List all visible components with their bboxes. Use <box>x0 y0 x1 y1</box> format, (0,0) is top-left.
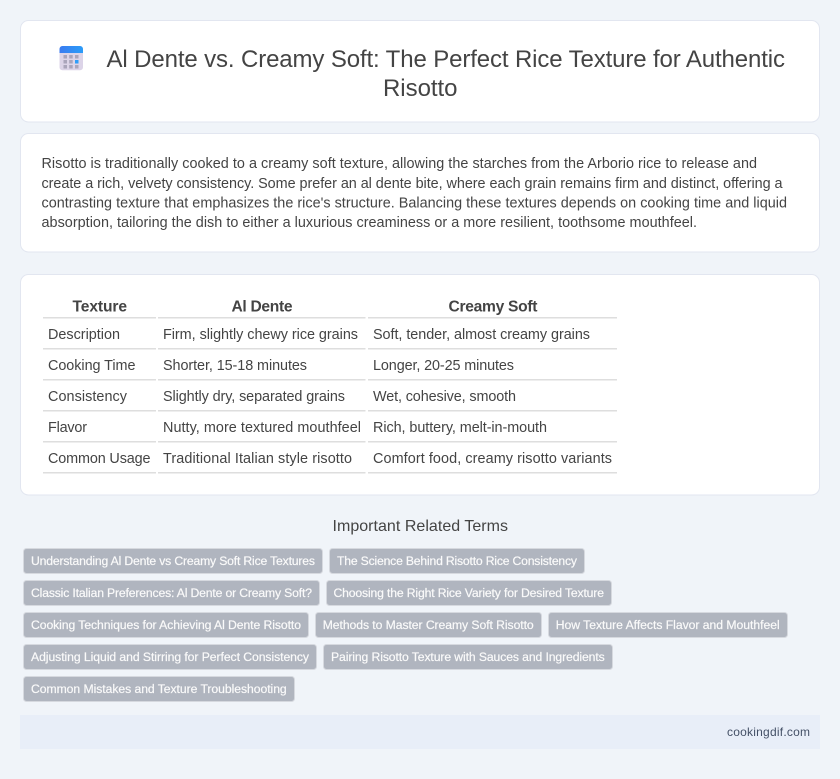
table row: consistency: Slightly dry, separated grains <box>163 389 345 405</box>
tag <box>24 676 294 702</box>
tag: Adjusting Liquid and Stirring for Perfect Consistency <box>31 650 310 664</box>
table row: consistency <box>43 389 617 412</box>
table header row: Creamy Soft <box>448 298 538 316</box>
title <box>106 46 785 102</box>
table row: cooking time: Longer, 20-25 minutes <box>373 358 514 374</box>
tag: Choosing the Right Rice Variety for Desired Texture <box>334 586 604 600</box>
panel: introduction <box>20 134 820 252</box>
table header row: Al Dente <box>232 298 293 316</box>
heading: important related terms: Important Related Terms <box>332 518 508 535</box>
tag <box>324 644 612 670</box>
table row: flavor: Nutty, more textured mouthfeel <box>163 420 361 436</box>
tag: The Science Behind Risotto Rice Consistency <box>337 554 578 568</box>
table row: description: Description <box>48 327 120 343</box>
table header row: Texture <box>72 298 127 316</box>
tag: Cooking Techniques for Achieving Al Dente Risotto <box>31 618 301 632</box>
table row: description <box>43 327 617 350</box>
table row: flavor: Rich, buttery, melt-in-mouth <box>373 420 547 436</box>
tag: Understanding Al Dente vs Creamy Soft Rice Textures <box>31 554 315 568</box>
footer source text: cookingdif.com <box>727 725 810 739</box>
tag <box>24 580 320 606</box>
table row: common usage: Common Usage <box>48 451 150 467</box>
tag: How Texture Affects Flavor and Mouthfeel <box>556 618 780 632</box>
footer <box>20 715 820 749</box>
table row: description: Soft, tender, almost creamy grains <box>373 327 590 343</box>
related terms tags <box>24 548 788 702</box>
title: Risotto <box>383 75 458 102</box>
tag: Classic Italian Preferences: Al Dente or Creamy Soft? <box>31 586 312 600</box>
text block: introduction paragraph: create a rich, velvety consistency. Some prefer an al dente bite, where each grain remains firm and distinct, offering a <box>42 176 782 192</box>
tag <box>24 612 308 638</box>
tag: Pairing Risotto Texture with Sauces and Ingredients <box>331 650 605 664</box>
tag <box>330 548 584 574</box>
table header row <box>43 298 617 318</box>
table row: consistency: Consistency <box>48 389 128 405</box>
table row: cooking time: Cooking Time <box>48 358 136 374</box>
panel: header <box>20 20 820 122</box>
table row: description: Firm, slightly chewy rice grains <box>163 327 358 343</box>
table row: common usage <box>43 451 617 474</box>
table row: common usage: Traditional Italian style risotto <box>163 451 352 467</box>
tag <box>548 612 788 638</box>
text block: introduction paragraph: Risotto is traditionally cooked to a creamy soft texture, allowing the starches from the Arborio rice to release and <box>42 156 757 172</box>
table row: flavor <box>43 420 617 442</box>
tag: Methods to Master Creamy Soft Risotto <box>323 618 534 632</box>
tag: Common Mistakes and Texture Troubleshooting <box>31 682 287 696</box>
tag <box>326 580 612 606</box>
text block: introduction paragraph: absorption, tailoring the dish to either a luxurious creaminess or a more resilient, toothsome mouthfeel. <box>42 215 697 231</box>
tag <box>24 548 322 574</box>
tag <box>316 612 542 638</box>
table row: consistency: Wet, cohesive, smooth <box>373 389 516 405</box>
table row: flavor: Flavor <box>48 420 87 436</box>
tag <box>24 644 316 670</box>
table row: cooking time <box>43 358 617 380</box>
text block: introduction paragraph: contrasting texture that emphasizes the rice's structure. Balancing these textures depends on cooking time and liquid <box>42 196 787 212</box>
icon: calendar <box>60 46 83 70</box>
text block: introduction paragraph <box>42 156 787 231</box>
table row: common usage: Comfort food, creamy risotto variants <box>373 451 612 467</box>
title: Al Dente vs. Creamy Soft: The Perfect Rice Texture for Authentic <box>106 46 785 73</box>
table row: cooking time: Shorter, 15-18 minutes <box>163 358 307 374</box>
panel: comparison table <box>20 274 820 495</box>
